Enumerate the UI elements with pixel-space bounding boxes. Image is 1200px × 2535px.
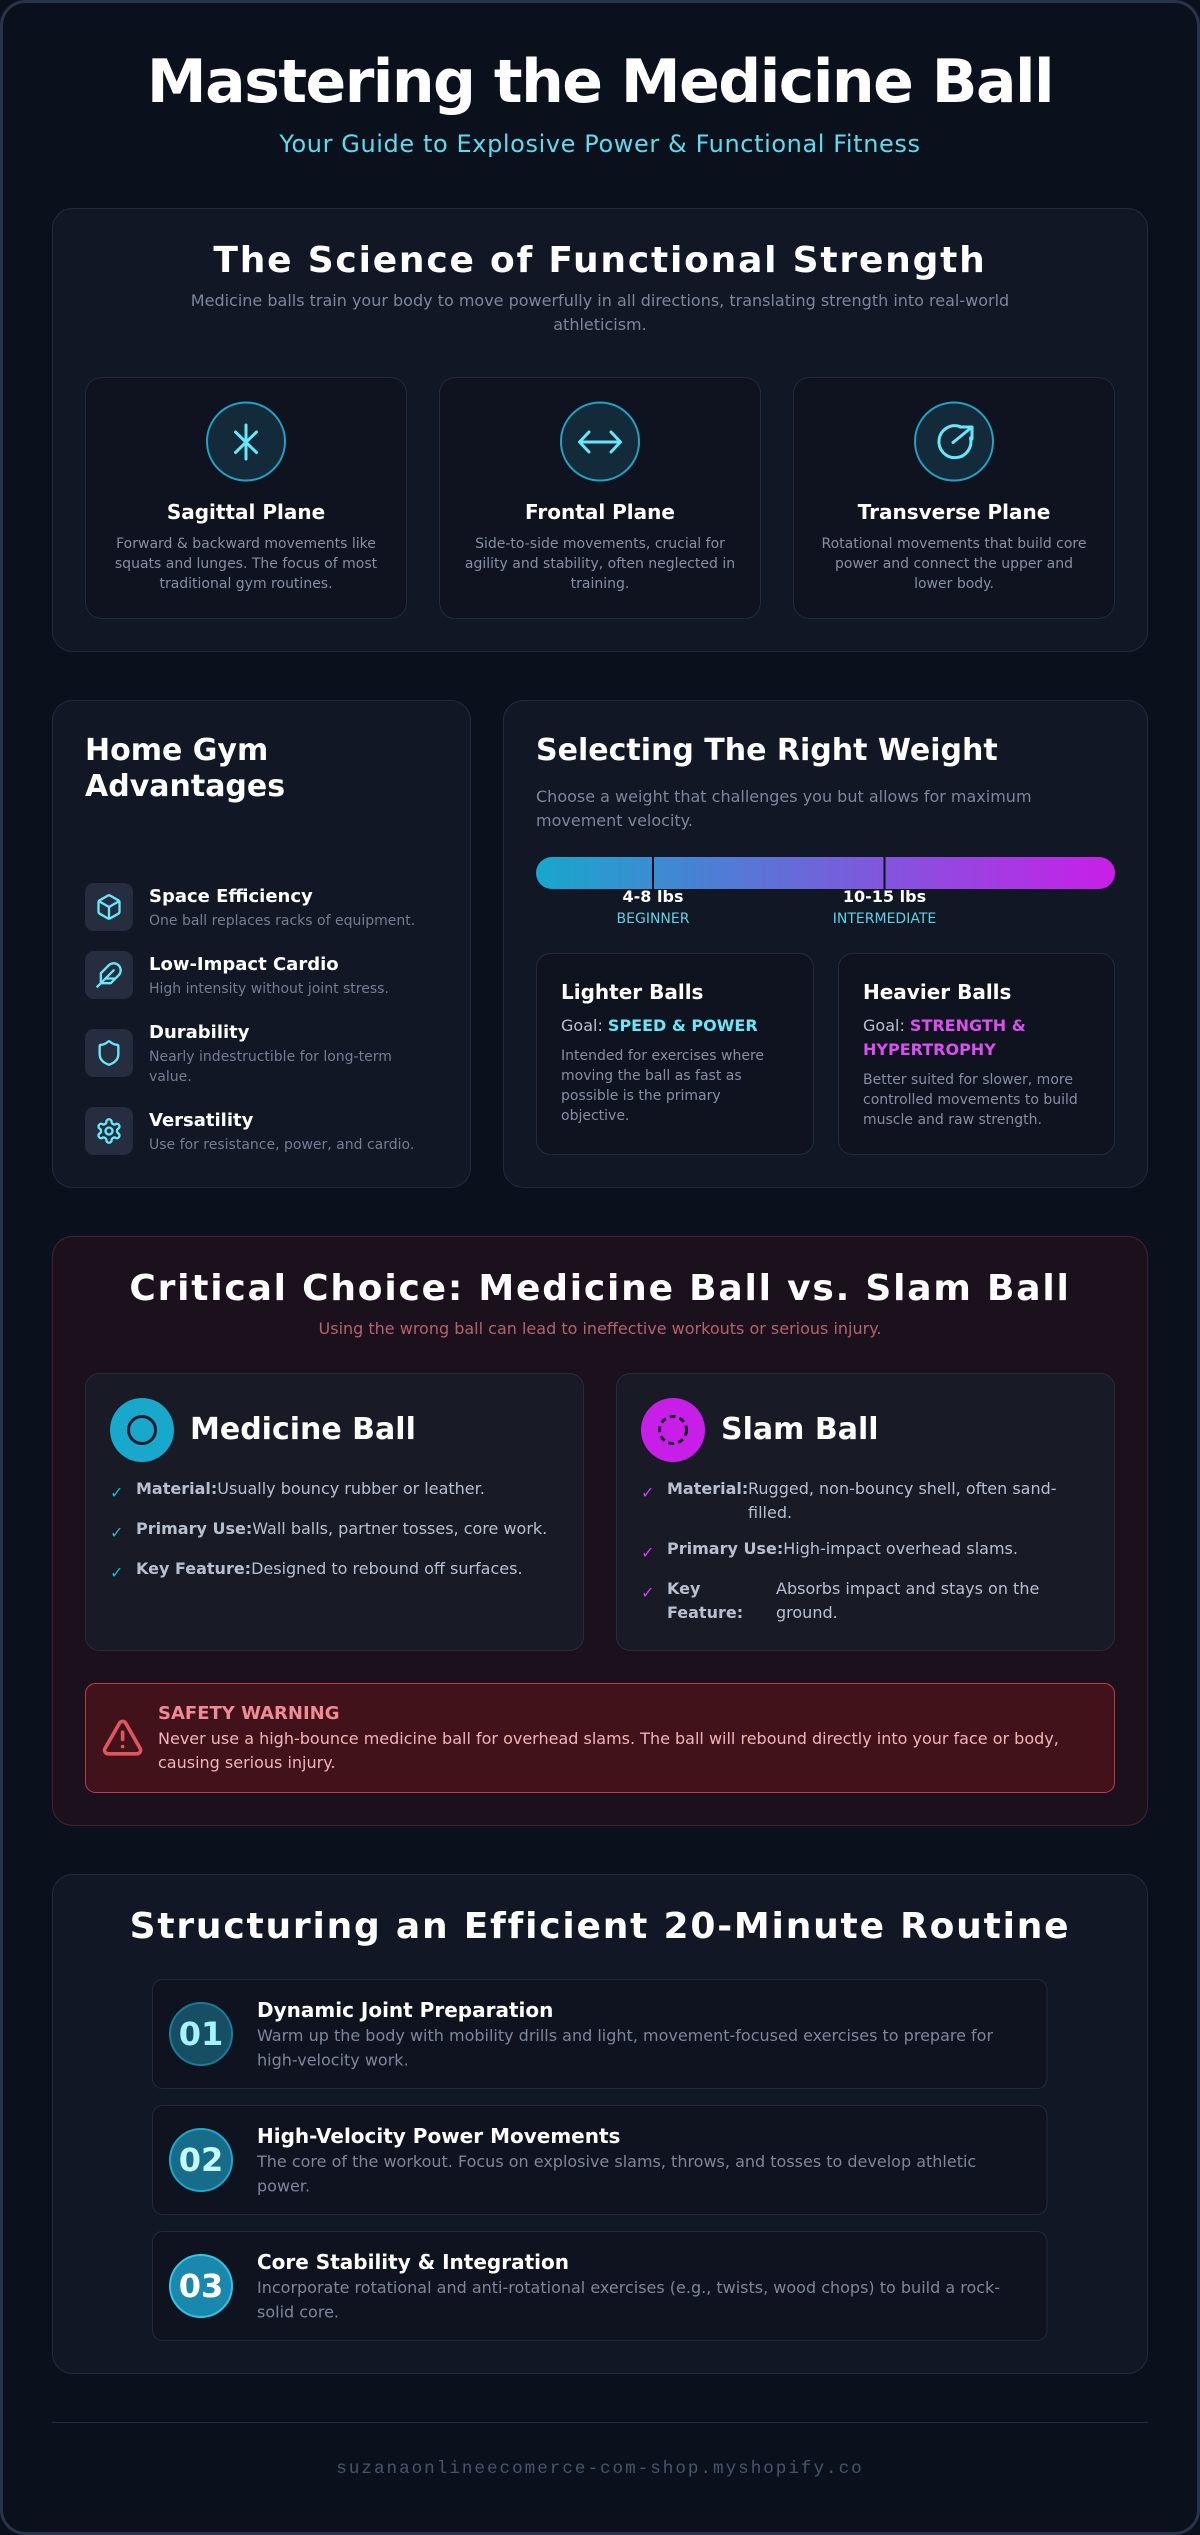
step 01 xyxy=(152,1980,1047,2088)
panel: selecting the right weight xyxy=(504,700,1148,1188)
warning subheading: Using the wrong ball can lead to ineffective workouts or serious injury. xyxy=(319,1319,881,1338)
card: frontal plane: agility and stability, often neglected in xyxy=(465,556,735,572)
weight gradient bar: 4-8 lbs xyxy=(623,887,683,906)
card: heavier balls xyxy=(838,954,1114,1154)
item: low-impact cardio xyxy=(85,951,389,999)
icon: slam ball xyxy=(641,1398,705,1462)
card: transverse plane: Transverse Plane xyxy=(858,500,1050,524)
subtitle: Your Guide to Explosive Power & Functional Fitness xyxy=(278,130,921,158)
item: space efficiency: Space Efficiency xyxy=(149,886,313,907)
card: transverse plane: power and connect the upper and xyxy=(835,556,1073,572)
spec list xyxy=(110,1479,547,1582)
weight gradient bar: 10-15 lbs xyxy=(843,887,926,906)
icon: frontal xyxy=(561,402,639,480)
spec list: ✓ xyxy=(110,1483,123,1502)
step 01: high-velocity work. xyxy=(257,2050,409,2070)
step 01: Warm up the body with mobility drills and light, movement-focused exercises to prepare for xyxy=(257,2026,993,2045)
panel: critical choice xyxy=(52,1236,1148,1826)
spec list: Material:Usually bouncy rubber or leather. xyxy=(136,1479,485,1498)
spec list: Primary Use:Wall balls, partner tosses, core work. xyxy=(136,1519,547,1538)
header xyxy=(147,47,1053,158)
step 03: Incorporate rotational and anti-rotational exercises (e.g., twists, wood chops) to build a rock- xyxy=(257,2278,1000,2297)
heading: The Science of Functional Strength xyxy=(213,240,987,281)
item: versatility: Versatility xyxy=(149,1110,254,1131)
icon: transverse xyxy=(915,402,993,480)
card: sagittal plane: squats and lunges. The focus of most xyxy=(115,556,378,572)
spec list: ✓ xyxy=(110,1523,123,1542)
heading: Critical Choice: Medicine Ball vs. Slam Ball xyxy=(129,1268,1071,1309)
step 03 xyxy=(152,2232,1047,2340)
panel: home gym advantages xyxy=(52,700,470,1188)
weight gradient bar: BEGINNER xyxy=(617,911,690,927)
step 02: High-Velocity Power Movements xyxy=(257,2124,620,2148)
spec list: ✓ xyxy=(641,1583,654,1602)
card: frontal plane xyxy=(440,378,760,618)
card: sagittal plane: Sagittal Plane xyxy=(167,500,325,524)
card: heavier balls: Better suited for slower, more xyxy=(863,1072,1073,1088)
heading: Advantages xyxy=(85,769,285,804)
weight gradient bar xyxy=(536,857,1115,927)
card: lighter balls xyxy=(536,954,814,1154)
step 03: Core Stability & Integration xyxy=(257,2250,569,2274)
spec list: Material: xyxy=(667,1479,748,1498)
callout: safety warning xyxy=(86,1684,1114,1792)
card: heavier balls: Goal: STRENGTH & xyxy=(863,1016,1026,1035)
title: Mastering the Medicine Ball xyxy=(147,47,1053,117)
card: sagittal plane xyxy=(86,378,406,618)
heading: Structuring an Efficient 20-Minute Routine xyxy=(130,1906,1070,1947)
intro text: movement velocity. xyxy=(536,811,693,830)
card: lighter balls: Lighter Balls xyxy=(561,980,703,1004)
icon: medicine ball xyxy=(110,1398,174,1462)
spec list: filled. xyxy=(748,1503,792,1522)
panel: 20-minute routine xyxy=(52,1874,1148,2374)
card: heavier balls: muscle and raw strength. xyxy=(863,1112,1042,1128)
card: transverse plane: Rotational movements that build core xyxy=(821,536,1087,552)
card: sagittal plane: traditional gym routines. xyxy=(159,576,333,592)
item: space efficiency: One ball replaces racks of equipment. xyxy=(149,913,415,929)
step 02: power. xyxy=(257,2176,310,2196)
step 02: The core of the workout. Focus on explosive slams, throws, and tosses to develop athletic xyxy=(256,2152,976,2171)
item: versatility xyxy=(85,1107,414,1155)
step 02 xyxy=(152,2106,1047,2214)
card: transverse plane: lower body. xyxy=(914,576,994,592)
card: sagittal plane: Forward & backward movements like xyxy=(116,536,376,552)
item: durability: value. xyxy=(149,1069,192,1085)
step 03: 03 xyxy=(179,2267,223,2305)
spec list xyxy=(641,1479,1057,1622)
card: frontal plane: Frontal Plane xyxy=(525,500,675,524)
spec list: Feature: xyxy=(667,1603,743,1622)
step 02: 02 xyxy=(179,2141,223,2179)
card: lighter balls: objective. xyxy=(561,1108,629,1124)
card: medicine ball: Medicine Ball xyxy=(190,1412,416,1447)
spec list: Rugged, non-bouncy shell, often sand- xyxy=(748,1479,1057,1498)
card: lighter balls: possible is the primary xyxy=(561,1088,721,1104)
card: heavier balls: Heavier Balls xyxy=(863,980,1011,1004)
item: versatility: Use for resistance, power, and cardio. xyxy=(149,1137,414,1153)
card: slam ball: Slam Ball xyxy=(721,1412,879,1447)
heading: Selecting The Right Weight xyxy=(536,733,998,768)
step 03: solid core. xyxy=(257,2302,339,2322)
card: lighter balls: Goal: SPEED & POWER xyxy=(561,1016,758,1035)
spec list: ground. xyxy=(776,1603,838,1622)
spec list: Key xyxy=(667,1579,701,1598)
intro text: Choose a weight that challenges you but allows for maximum xyxy=(536,787,1032,806)
panel: science of functional strength xyxy=(52,208,1148,652)
spec list: ✓ xyxy=(641,1483,654,1502)
item: durability xyxy=(85,1022,392,1085)
spec list: ✓ xyxy=(110,1563,123,1582)
icon: sagittal xyxy=(207,402,285,480)
card: lighter balls: moving the ball as fast as xyxy=(561,1068,742,1084)
card: transverse plane xyxy=(794,378,1114,618)
card: slam ball xyxy=(616,1374,1114,1650)
item: low-impact cardio: High intensity without joint stress. xyxy=(149,981,389,997)
card: lighter balls: Intended for exercises where xyxy=(561,1048,764,1064)
callout: safety warning: causing serious injury. xyxy=(158,1753,335,1772)
item: space efficiency xyxy=(85,883,415,931)
card: frontal plane: Side-to-side movements, crucial for xyxy=(475,536,725,552)
heading: Home Gym xyxy=(85,733,268,768)
spec list: Absorbs impact and stays on the xyxy=(776,1579,1039,1598)
intro text: Medicine balls train your body to move powerfully in all directions, translating strength into real-world xyxy=(191,291,1009,310)
footer: suzanaonlineecomerce-com-shop.myshopify.co xyxy=(336,2459,864,2479)
step 01: 01 xyxy=(179,2015,223,2053)
card: medicine ball xyxy=(86,1374,584,1650)
spec list: Primary Use:High-impact overhead slams. xyxy=(667,1539,1018,1558)
spec list: Key Feature:Designed to rebound off surfaces. xyxy=(136,1559,523,1578)
intro text: athleticism. xyxy=(553,315,647,334)
weight gradient bar: INTERMEDIATE xyxy=(833,911,936,927)
item: durability: Durability xyxy=(149,1022,250,1043)
card: heavier balls: HYPERTROPHY xyxy=(863,1040,996,1059)
spec list: ✓ xyxy=(641,1543,654,1562)
item: low-impact cardio: Low-Impact Cardio xyxy=(149,954,339,975)
callout: safety warning: SAFETY WARNING xyxy=(158,1703,340,1724)
step 01: Dynamic Joint Preparation xyxy=(257,1998,553,2022)
callout: safety warning: Never use a high-bounce medicine ball for overhead slams. The ball will rebound directly into your face or body, xyxy=(158,1729,1059,1748)
card: heavier balls: controlled movements to build xyxy=(863,1092,1078,1108)
card: frontal plane: training. xyxy=(571,576,629,592)
icon: warning triangle xyxy=(105,1721,141,1754)
item: durability: Nearly indestructible for long-term xyxy=(149,1049,392,1065)
